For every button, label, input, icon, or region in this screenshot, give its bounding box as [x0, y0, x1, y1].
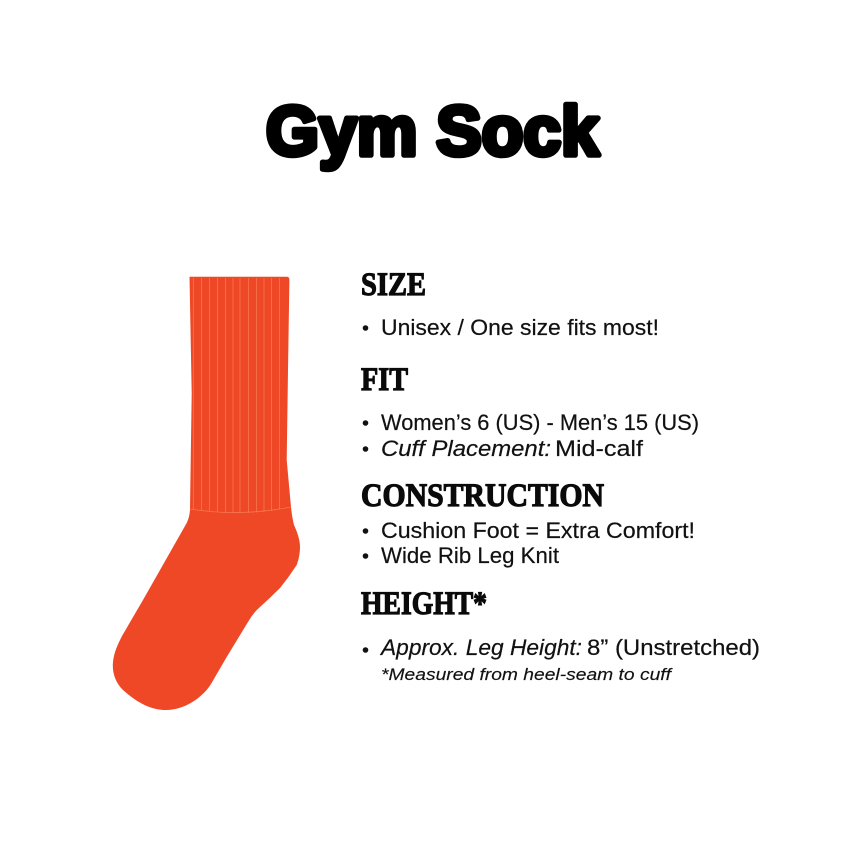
bullet: cuff placement [363, 436, 644, 461]
section: fit [361, 362, 699, 461]
heading: fit: FIT [361, 362, 408, 398]
section: height [361, 586, 760, 684]
bullet: leg height: Approx. Leg Height: [379, 635, 582, 660]
bullet: sizes: Women’s 6 (US) - Men’s 15 (US) [381, 410, 699, 435]
heading: height: HEIGHT* [361, 586, 487, 622]
leg rib lines [190, 278, 291, 513]
section: construction [361, 478, 695, 568]
icon: orange sock illustration [113, 277, 300, 710]
heading: size: SIZE [361, 267, 426, 303]
sock body [113, 277, 300, 710]
title: Gym Sock [266, 92, 599, 170]
bullet: leg height [363, 635, 760, 660]
footnote: *Measured from heel-seam to cuff [381, 665, 674, 684]
bullet: cuff placement: Cuff Placement: [381, 436, 551, 461]
bullet: cushion foot: Cushion Foot = Extra Comfort! [381, 518, 695, 543]
bullet: wide rib: Wide Rib Leg Knit [381, 543, 560, 568]
bullet: cuff placement: Mid-calf [555, 436, 644, 461]
section: size [361, 267, 659, 340]
heading: construction: CONSTRUCTION [361, 478, 604, 514]
bullet: leg height: 8” (Unstretched) [587, 635, 760, 660]
bullet: one size: Unisex / One size fits most! [381, 315, 659, 340]
